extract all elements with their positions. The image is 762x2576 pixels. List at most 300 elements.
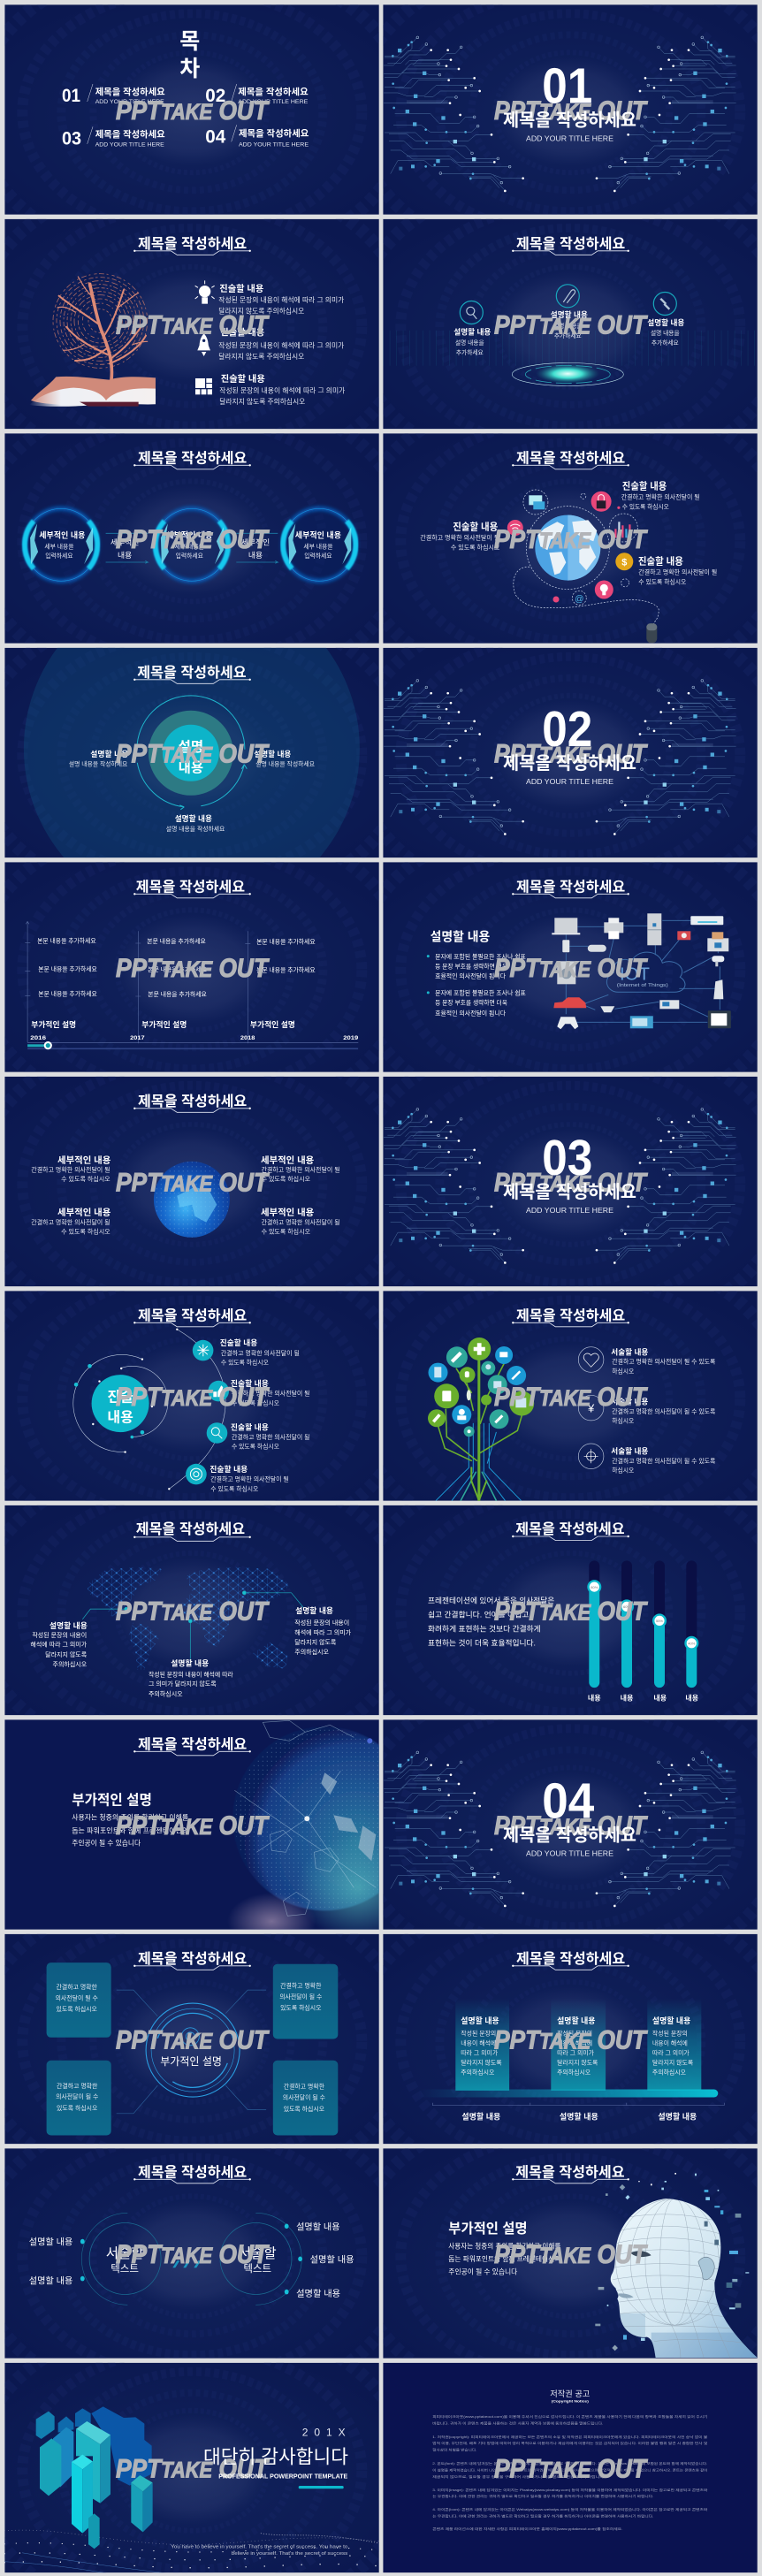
- item 01: 01: [62, 86, 80, 106]
- right circle with arc: [220, 2213, 301, 2305]
- watermark: PPTTAKE OUT: [494, 525, 648, 554]
- left circle label: 서술할: [106, 2245, 143, 2261]
- bar chart: [589, 1560, 697, 1688]
- right labels: [296, 2222, 354, 2299]
- notice body: 법적 이용, 무단전재, 배포 기타 방법에 의하여 영리 목적으로 이용하거나 제삼자에게 이용하는 것은 금지되어 있습니다. 이러한 불법 행위 발견 시 종합한 민사 및: [432, 2441, 708, 2445]
- notice body: 형사상의 처벌을 받습니다.: [432, 2448, 476, 2452]
- central label: 부가적인 설명: [160, 2055, 222, 2068]
- block lower right: 수 있도록 하십시오: [638, 577, 687, 585]
- callout right: 작성된 문장의 내용이: [294, 1619, 349, 1627]
- label left: [69, 749, 128, 767]
- heading: contents: 목: [179, 29, 200, 54]
- icon: rocket: [197, 333, 210, 356]
- section title: 제목을 작성하세요: [503, 1825, 636, 1845]
- label right: [254, 749, 315, 767]
- block 3 text: 작성된 문장의 내용이 해석에 따라 그 의미가: [219, 386, 346, 395]
- column 1 text: 부가적인 설명: [31, 1019, 76, 1029]
- block top right: 수 있도록 하십시오: [622, 503, 669, 511]
- bullet text: [427, 952, 526, 1017]
- column 1 text: 달라지지 않도록: [461, 2059, 502, 2067]
- description: 돕는 파워포인트와 함께 프레젠테이션의: [448, 2254, 560, 2263]
- section subtitle: ADD YOUR TITLE HERE: [526, 133, 613, 142]
- bullet text: 문자에 포함된 불필요한 조사나 쉼표: [435, 952, 526, 960]
- slide: medical tree: [383, 1291, 758, 1501]
- slide: section 02: [383, 647, 758, 857]
- globe image: [227, 1720, 420, 1949]
- hologram platform: [512, 362, 623, 385]
- body text: 화려하게 표현하는 것보다 간결하게: [428, 1623, 541, 1633]
- quote: You have to believe in yourself. That's the secret of success. You have to: [171, 2544, 347, 2549]
- section number: 02: [542, 701, 592, 758]
- section subtitle: ADD YOUR TITLE HERE: [526, 1848, 613, 1857]
- accent bar: [299, 2486, 344, 2488]
- card bottom left: 간결하고 명확한: [57, 2082, 98, 2090]
- core circles: [149, 711, 233, 796]
- item 1 text: 간결하고 명확한 의사전달이 될 수 있도록: [612, 1358, 716, 1366]
- year labels: 2017: [130, 1035, 145, 1041]
- column 3 text: 부가적인 설명: [250, 1019, 295, 1029]
- icon node 1: [193, 1340, 213, 1360]
- item 4 text: 간결하고 명확한 의사전달이 될: [210, 1475, 289, 1483]
- watermark: PPTTAKE OUT: [494, 739, 648, 768]
- icon: at sign: @: [575, 594, 583, 604]
- item 3 text: 간결하고 명확한 의사전달이 될 수 있도록: [612, 1457, 716, 1465]
- icon: wifi: [507, 520, 523, 536]
- block upper right: 간결하고 명확한 의사전달이 될: [262, 1166, 340, 1174]
- icon: mouse: [646, 623, 657, 643]
- column 2 text: 따라 그 의미가: [557, 2049, 595, 2057]
- title: 제목을 작성하세요: [138, 236, 248, 252]
- device: game controller: [588, 945, 606, 952]
- slide: internet of things: [383, 862, 758, 1072]
- card bottom left: 있도록 하십시오: [57, 2104, 97, 2112]
- column 3 text: 설명할 내용: [652, 2016, 690, 2025]
- leader lines: [82, 1591, 303, 1659]
- circuit board decoration: [384, 1751, 736, 1907]
- slide: orbit list: [4, 1291, 379, 1501]
- callout right: [294, 1605, 352, 1656]
- item 1 text: 서술할 내용: [611, 1346, 648, 1356]
- watermark: PPTTAKE OUT: [116, 2454, 270, 2483]
- notice body: 1. 저작권(copyright): 피피티테이크아웃에서 제공하는 모든 콘텐츠의 소유 및 저작권은 피피티테이크아웃에게 있습니다. 피피티테이크아웃의 사전 승낙 없이 불: [432, 2435, 708, 2439]
- card top right: [273, 1964, 338, 2039]
- callout bottom: 설명할 내용: [171, 1658, 209, 1668]
- core label: [179, 739, 203, 776]
- column 3 text: 달라지지 않도록: [652, 2059, 693, 2067]
- column 1 text: 본문 내용을 추가하세요: [38, 964, 97, 972]
- column 2 text: 부가적인 설명: [141, 1019, 187, 1029]
- device: laptop: [552, 918, 580, 934]
- central circle: 내용: [107, 1410, 133, 1426]
- quote: [171, 2544, 348, 2557]
- label right: 설명할 내용: [647, 317, 684, 327]
- item 04: 04: [205, 126, 226, 147]
- icon: chat: [529, 495, 545, 509]
- label middle: [551, 309, 588, 339]
- icon node 3: [207, 1422, 227, 1444]
- title: 제목을 작성하세요: [516, 450, 626, 466]
- callout bottom: [149, 1658, 233, 1697]
- slide: three glowing rings: [4, 433, 379, 644]
- slide: globe network: [383, 433, 758, 644]
- column 2 text: 본문 내용을 추가하세요: [148, 965, 207, 973]
- data streaks: [383, 331, 757, 366]
- block lower left: 세부적인 내용: [57, 1207, 111, 1218]
- section number: 01: [542, 58, 592, 115]
- watermark: PPTTAKE OUT: [116, 310, 270, 339]
- slide: world map: [4, 1505, 379, 1715]
- item 03: 제목을 작성하세요: [95, 128, 165, 140]
- watermark: PPTTAKE OUT: [116, 2240, 270, 2269]
- description: 돕는 파워포인트와 함께 프레젠테이션의: [72, 1825, 188, 1834]
- description: 사용자는 청중의 주의를 환기하고 이해를: [72, 1813, 188, 1822]
- left circle with arc: [81, 2213, 161, 2305]
- watermark: PPTTAKE OUT: [494, 1168, 648, 1197]
- device: phone: [562, 940, 569, 952]
- column 2 text: [141, 937, 207, 1029]
- block top right: 간결하고 명확한 의사전달이 될: [621, 493, 700, 501]
- block 1 text: [218, 283, 345, 315]
- notice body: 피피티테이크아웃(www.pptakeout.com)을 이용해 주셔서 진심으로 감사드립니다. 이 콘텐츠 제품을 사용하기 전에 다음의 항목과 조항들을 자세히 읽어 주시기: [432, 2414, 707, 2419]
- block lower right: 진술할 내용: [638, 556, 683, 568]
- leader lines: [117, 1990, 266, 2114]
- item 4 text: 진술할 내용: [210, 1464, 248, 1474]
- description: 주인공이 될 수 있습니다: [72, 1839, 141, 1848]
- label right: 설명 내용을 작성하세요: [255, 759, 315, 767]
- title: 제목을 작성하세요: [138, 1094, 248, 1109]
- watermark: PPTTAKE OUT: [494, 1597, 648, 1626]
- bar chart: 55%: [656, 1619, 663, 1623]
- column 2 text: 설명할 내용: [557, 2016, 596, 2025]
- block lower right: [638, 556, 717, 585]
- body text: 쉽고 간결합니다. 언어를 어렵고: [428, 1609, 529, 1619]
- label right: 설명 내용을: [651, 329, 680, 337]
- card bottom right: [273, 2061, 338, 2136]
- block lower right: 수 있도록 하십시오: [262, 1228, 311, 1236]
- column 1 text: 설명할 내용: [461, 2016, 499, 2025]
- device: washing machine: [557, 961, 575, 984]
- device: iron: [713, 979, 723, 999]
- title: 제목을 작성하세요: [515, 1521, 625, 1537]
- block lower right: 세부적인 내용: [261, 1207, 315, 1218]
- ring right text: 입력하세요: [304, 552, 332, 560]
- ring middle text: [166, 530, 212, 560]
- item 4 text: [210, 1464, 289, 1492]
- label left: 설명 내용을: [455, 339, 484, 347]
- notice body: 제공되지 않으므로, 필요할 경우 정품을 구매하여 사용하거나 다른 폰트로 변경하시기 바랍니다.: [432, 2474, 605, 2479]
- ring right text: [295, 530, 341, 560]
- item 4 text: 수 있도록 하십시오: [210, 1484, 259, 1492]
- device: microwave: [630, 1016, 653, 1028]
- notice body: 는 무관합니다. 이에 관한 권리는 귀하가 별도로 확인하고 필요할 경우 허가를 취득하거나 아이콘을 변경하여 사용하시기 바랍니다.: [432, 2514, 653, 2519]
- item 3 text: 하십시오: [612, 1467, 635, 1475]
- watermark: PPTTAKE OUT: [494, 310, 648, 339]
- core label: 내용: [179, 759, 203, 775]
- block 2 text: 작성된 문장의 내용이 해석에 따라 그 의미가: [218, 340, 345, 349]
- slide: timeline: [4, 862, 379, 1072]
- notice body: 2. 폰트(font): 콘텐츠 내에 담겨있는 폰트는 저작권의 문제가 없는 무료 폰트로 구성되어 있습니다. 폰트는 Windows System에 포함된 폰트와 함께 제작되었습니다.: [432, 2461, 707, 2465]
- year labels: 2019: [343, 1035, 359, 1041]
- icon: heart: [578, 1347, 604, 1372]
- block 1 text: 진술할 내용: [219, 283, 263, 294]
- callout bottom: 그 의미가 달라지지 않도록: [149, 1680, 217, 1688]
- block left: 수 있도록 하십시오: [451, 543, 500, 551]
- item 02: 02: [205, 86, 225, 106]
- watermark: PPTTAKE OUT: [116, 96, 270, 126]
- watermark: PPTTAKE OUT: [494, 1811, 648, 1841]
- title: 제목을 작성하세요: [516, 1951, 626, 1967]
- body text: 프레젠테이션에 있어서 좋은 의사전달은: [428, 1595, 554, 1604]
- slide: tree and book: [4, 219, 379, 430]
- column 3 text: 내용이 해석에: [652, 2039, 688, 2047]
- slide: wireframe head: [383, 2148, 758, 2359]
- block 3 text: 진술할 내용: [221, 373, 265, 385]
- connection lines: [566, 920, 720, 1022]
- callout left: 설명할 내용: [50, 1620, 88, 1630]
- card bottom right: 의사전달이 될 수: [283, 2093, 325, 2101]
- watermark: PPTTAKE OUT: [116, 1168, 270, 1197]
- section subtitle: ADD YOUR TITLE HERE: [526, 777, 613, 786]
- callout left: 달라지지 않도록: [45, 1650, 88, 1658]
- icon: bulb: [595, 580, 613, 599]
- slide: section 03: [383, 1077, 758, 1287]
- watermark: PPTTAKE OUT: [116, 1383, 270, 1412]
- ring right: [282, 507, 356, 582]
- right circle label: 텍스트: [243, 2263, 271, 2275]
- block 3 text: 달라지지 않도록 주의하십시오: [219, 397, 305, 406]
- base bar: [418, 2090, 718, 2097]
- title: 제목을 작성하세요: [136, 879, 245, 895]
- label bottom: 설명 내용을 작성하세요: [166, 825, 225, 833]
- callout left: [30, 1620, 88, 1668]
- description: [448, 2242, 560, 2275]
- icon: grid: [195, 378, 212, 394]
- item 1 text: 수 있도록 하십시오: [221, 1358, 269, 1366]
- watermark: PPTTAKE OUT: [494, 2240, 648, 2269]
- connector text right: 내용: [248, 551, 263, 560]
- core label: 설명: [179, 739, 203, 755]
- block lower left: [31, 1207, 111, 1236]
- mesh world map: [87, 1567, 289, 1670]
- columns: [455, 1999, 701, 2091]
- block 1 text: 작성된 문장의 내용이 해석에 따라 그 의미가: [218, 295, 345, 304]
- ring middle text: 세부 내용을: [175, 542, 204, 550]
- card top left: [47, 1962, 111, 2038]
- card top left: 있도록 하십시오: [57, 2005, 97, 2013]
- template subtitle: PROFESSIONAL POWERPOINT TEMPLATE: [218, 2472, 347, 2480]
- icon: link: [653, 292, 676, 315]
- title: 제목을 작성하세요: [137, 665, 247, 681]
- block 1 text: 달라지지 않도록 주의하십시오: [218, 306, 304, 315]
- notice body: [432, 2414, 708, 2531]
- body text: 표현하는 것이 더욱 효율적입니다.: [428, 1637, 536, 1647]
- left circle label: 텍스트: [110, 2263, 139, 2275]
- slide: hologram with three icons: [383, 219, 758, 430]
- iot cloud: [606, 952, 685, 992]
- bar labels: 내용: [621, 1693, 634, 1702]
- item 02: [205, 84, 309, 106]
- column 1 text: 주의하십시오: [461, 2069, 494, 2077]
- icon node 4: [186, 1464, 207, 1484]
- axis labels: 설명할 내용: [658, 2112, 697, 2122]
- slide: four cards around circle: [4, 1934, 379, 2145]
- card bottom right: 간결하고 명확한: [284, 2083, 325, 2091]
- label middle: 설명할 내용: [551, 309, 588, 319]
- icon: search: [460, 301, 483, 324]
- item 2 text: 하십시오: [612, 1417, 635, 1425]
- label left: 설명 내용을 작성하세요: [69, 759, 127, 767]
- notice body: 바랍니다. 귀하가 이 콘텐츠 제품을 사용하는 것은 사용자 계약과 보증에 동의하셨음을 말씀드립니다.: [432, 2421, 603, 2426]
- column 1 text: [461, 2016, 502, 2076]
- column 2 text: 본문 내용을 추가하세요: [147, 937, 206, 945]
- title: 제목을 작성하세요: [515, 2164, 625, 2180]
- connector text left: 세부적인: [110, 537, 139, 546]
- device: printer: [604, 918, 623, 939]
- callout left: 작성된 문장의 내용이: [32, 1631, 87, 1639]
- block 2 text: [218, 327, 345, 361]
- orbit dots: [74, 1329, 179, 1490]
- wireframe head illustration: [595, 2173, 758, 2359]
- watermark: PPTTAKE OUT: [494, 954, 648, 983]
- item 1 text: 하십시오: [612, 1367, 635, 1375]
- item 2 text: [611, 1396, 716, 1425]
- icon: lock: [591, 492, 612, 512]
- tree trunk and branches: [436, 1360, 522, 1500]
- item 2 text: 간결하고 명확한 의사전달이 될: [232, 1390, 310, 1398]
- right circle label: 서술할: [239, 2245, 277, 2261]
- axis: [432, 2103, 724, 2106]
- connector text left: 내용: [118, 551, 132, 560]
- watermark: PPTTAKE OUT: [116, 2025, 270, 2054]
- section subtitle: ADD YOUR TITLE HERE: [526, 1206, 613, 1215]
- label right: 설명할 내용: [254, 749, 291, 758]
- connector text right: [241, 537, 270, 560]
- column 1 text: 본문 내용을 추가하세요: [37, 936, 96, 944]
- left labels: 설명할 내용: [29, 2237, 72, 2248]
- device: air conditioner: [690, 916, 723, 925]
- label left: 설명할 내용: [453, 327, 491, 336]
- block 3 text: [219, 373, 346, 406]
- column 3 text: 따라 그 의미가: [652, 2049, 690, 2057]
- column 2 text: 내용이 해석에: [557, 2039, 592, 2047]
- icon: coin: $: [621, 557, 627, 568]
- block 2 text: 달라지지 않도록 주의하십시오: [218, 352, 304, 361]
- label middle: 설명 내용을: [553, 322, 583, 330]
- device: hair dryer: [712, 956, 724, 966]
- section title: 제목을 작성하세요: [503, 1182, 636, 1202]
- slide: three columns on base bar: [383, 1934, 758, 2145]
- block upper left: 수 있도록 하십시오: [61, 1175, 110, 1183]
- central circle: 진술: [107, 1389, 133, 1405]
- ring middle text: 입력하세요: [176, 552, 203, 560]
- column 1 text: [31, 936, 97, 1029]
- watermark: PPTTAKE OUT: [494, 1383, 648, 1412]
- card top right: 간결하고 명확한: [280, 1982, 322, 1990]
- item 04: 제목을 작성하세요: [239, 127, 309, 139]
- block upper left: [31, 1155, 111, 1183]
- icon: paperclip: [556, 285, 579, 308]
- subheading: 부가적인 설명: [72, 1792, 152, 1808]
- illustration: tree growing from book: [29, 274, 156, 407]
- watermark: PPTTAKE OUT: [494, 96, 648, 126]
- watermark: PPTTAKE OUT: [494, 2454, 648, 2483]
- iot cloud: IOT: [620, 965, 650, 985]
- circuit board decoration: [384, 679, 736, 835]
- item 1 text: [220, 1338, 300, 1366]
- bar labels: 내용: [653, 1693, 667, 1702]
- bar chart: 80%: [591, 1585, 598, 1589]
- bar labels: [588, 1693, 699, 1702]
- ring middle: [155, 507, 229, 582]
- iot cloud: (Internet of Things): [617, 983, 668, 988]
- item 01: 제목을 작성하세요: [95, 86, 165, 97]
- label right: [647, 317, 684, 347]
- ring left text: [39, 530, 85, 560]
- item 2 text: 진술할 내용: [231, 1378, 269, 1388]
- bar chart: 40%: [688, 1642, 696, 1646]
- column 3 text: 본문 내용을 추가하세요: [256, 937, 316, 945]
- callout right: 달라지지 않도록: [294, 1638, 337, 1646]
- bar labels: 내용: [588, 1693, 601, 1702]
- icon: yen: [578, 1395, 604, 1421]
- left labels: [29, 2237, 72, 2286]
- item 2 text: [231, 1378, 309, 1406]
- block upper left: 간결하고 명확한 의사전달이 될: [31, 1166, 110, 1174]
- section number: 03: [542, 1130, 592, 1186]
- item 3 text: 진술할 내용: [231, 1421, 269, 1431]
- axis labels: 설명할 내용: [560, 2112, 598, 2122]
- card bottom left: 의사전달이 될 수: [56, 2092, 98, 2100]
- block top right: [621, 481, 700, 511]
- block left: 간결하고 명확한 의사전달이 될: [420, 533, 499, 541]
- icon: yen: ¥: [587, 1401, 595, 1414]
- item 2 text: 서술할 내용: [611, 1396, 648, 1406]
- red dots: [553, 507, 621, 603]
- dot wave floor: [4, 2530, 378, 2575]
- ring left text: 입력하세요: [45, 552, 73, 560]
- item 03: 03: [62, 128, 81, 149]
- ring left text: 세부 내용을: [44, 542, 73, 550]
- callout left: 주의하십시오: [53, 1660, 88, 1668]
- subheading: 부가적인 설명: [448, 2221, 528, 2237]
- item 3 text: 수 있도록 하십시오: [232, 1443, 280, 1451]
- right labels: 설명할 내용: [296, 2289, 340, 2299]
- block lower right: 간결하고 명확한 의사전달이 될: [262, 1218, 340, 1226]
- card top right: 있도록 하십시오: [280, 2004, 321, 2012]
- bullet text: 등 문장 부호를 생략하면 더욱: [435, 999, 508, 1007]
- card top left: 의사전달이 될 수: [56, 1994, 98, 2002]
- device: fridge: [647, 913, 661, 945]
- dashed wire and orbit: [514, 490, 659, 623]
- quote: believe in yourself. That's the secret of success: [232, 2551, 348, 2557]
- column 1 text: 작성된 문장의: [461, 2030, 496, 2038]
- label bottom: 설명할 내용: [175, 813, 212, 823]
- item 3 text: 간결하고 명확한 의사전달이 될: [232, 1433, 310, 1441]
- connector text right: 세부적인: [241, 537, 270, 546]
- column 2 text: 주의하십시오: [557, 2069, 591, 2077]
- slide: two circles comparison: [4, 2148, 379, 2359]
- title: 제목을 작성하세요: [138, 1951, 248, 1967]
- orbit lines: [73, 1330, 225, 1489]
- item 3 text: 서술할 내용: [611, 1446, 648, 1456]
- item 2 text: 수 있도록 하십시오: [232, 1399, 280, 1406]
- title: 제목을 작성하세요: [516, 236, 626, 252]
- title: 제목을 작성하세요: [138, 1736, 248, 1752]
- column 2 text: 달라지지 않도록: [557, 2059, 598, 2067]
- item 02: ADD YOUR TITLE HERE: [238, 100, 308, 105]
- item 03: [62, 126, 165, 149]
- column 3 text: 작성된 문장의: [652, 2030, 688, 2038]
